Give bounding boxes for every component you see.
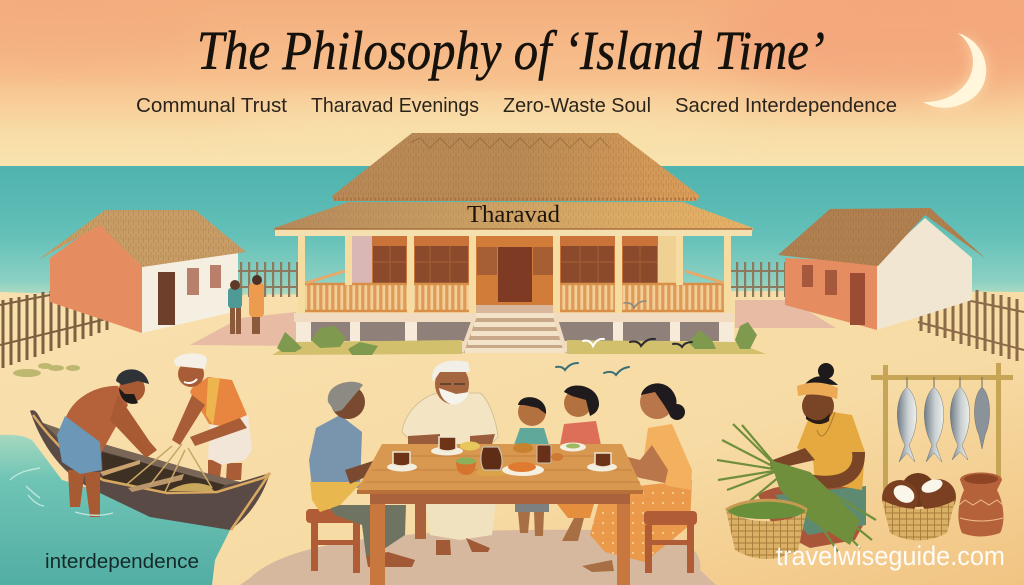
subheadings: Communal Trust bbox=[136, 95, 287, 117]
hair bun bbox=[818, 363, 834, 379]
Tharavad house bbox=[272, 133, 766, 355]
watermark: travelwiseguide.com bbox=[776, 541, 1005, 571]
right stool bbox=[644, 511, 697, 573]
boat hull bbox=[30, 410, 270, 530]
net lines bbox=[126, 444, 212, 492]
thatched roof bbox=[778, 208, 985, 266]
white wall bbox=[140, 250, 238, 333]
upper roof bbox=[332, 133, 700, 201]
sky background bbox=[0, 0, 1024, 167]
man two turban bbox=[174, 353, 207, 369]
sea bbox=[0, 166, 1024, 301]
man two dhoti bbox=[208, 414, 252, 465]
coconut basket bbox=[882, 473, 956, 540]
boat interior bbox=[102, 452, 225, 493]
man two head bbox=[178, 361, 204, 387]
left hut bbox=[38, 210, 246, 333]
grey-haired man bbox=[309, 382, 415, 567]
table bbox=[357, 444, 643, 585]
windows bbox=[802, 265, 837, 295]
orange wall bbox=[785, 258, 877, 330]
beach sand bbox=[0, 291, 1024, 585]
weaver bbox=[758, 363, 866, 548]
under floor bbox=[298, 322, 728, 341]
subheadings bbox=[136, 95, 897, 117]
hanging fish bbox=[897, 387, 990, 462]
door bbox=[498, 247, 532, 302]
clay pot bbox=[958, 472, 1003, 536]
label: Tharavad: Tharavad bbox=[467, 201, 560, 228]
back fences bbox=[238, 262, 790, 297]
steps bbox=[462, 313, 567, 353]
right hut bbox=[778, 208, 985, 330]
lily patches bbox=[13, 363, 80, 377]
family on the path bbox=[228, 275, 264, 334]
shadow under table bbox=[240, 530, 716, 585]
orange gable wall bbox=[50, 222, 142, 333]
subheadings: Tharavad Evenings bbox=[311, 95, 479, 117]
back wall bbox=[352, 236, 678, 312]
left stool bbox=[306, 509, 364, 573]
man one arm bbox=[110, 395, 157, 458]
elder bbox=[402, 361, 498, 555]
birds bbox=[556, 301, 692, 375]
head bbox=[802, 390, 834, 422]
turban bbox=[797, 382, 838, 399]
door bbox=[158, 272, 175, 325]
door bbox=[850, 273, 865, 325]
door bay bbox=[476, 236, 553, 305]
tea items bbox=[387, 437, 617, 476]
label: interdependence: interdependence bbox=[45, 550, 199, 573]
man one lungi bbox=[57, 416, 102, 474]
bamboo frame bbox=[871, 363, 1013, 493]
left fence bbox=[0, 281, 110, 368]
posts bbox=[298, 235, 731, 313]
man two sash bbox=[206, 378, 220, 425]
beard bbox=[806, 413, 830, 424]
thatched roof bbox=[38, 210, 246, 267]
child one bbox=[514, 397, 549, 536]
palm frond bbox=[717, 424, 876, 552]
back table leg bbox=[415, 504, 426, 539]
railings bbox=[305, 271, 724, 312]
veranda floor bbox=[476, 305, 553, 313]
family at the table bbox=[306, 361, 697, 585]
man two shirt bbox=[190, 377, 247, 426]
subheadings: Zero-Waste Soul bbox=[503, 95, 651, 117]
fish drying rack bbox=[871, 363, 1013, 493]
woven basket bbox=[726, 500, 807, 559]
shallow water bbox=[0, 435, 230, 585]
catch bbox=[168, 483, 214, 491]
subheadings: Sacred Interdependence bbox=[675, 95, 897, 117]
water ripples bbox=[10, 468, 113, 515]
sand patches bbox=[190, 300, 836, 346]
gardens bbox=[272, 340, 462, 355]
lower roof bbox=[274, 202, 753, 233]
window panes bbox=[373, 246, 657, 285]
piers bbox=[296, 322, 734, 345]
moon bbox=[923, 33, 986, 108]
woman bbox=[582, 383, 692, 572]
man one beard bbox=[119, 388, 138, 404]
child two bbox=[557, 386, 601, 541]
far side bbox=[43, 423, 240, 485]
windows bbox=[187, 265, 221, 295]
lap bbox=[758, 484, 866, 548]
man one cap bbox=[116, 369, 149, 385]
white wall bbox=[877, 218, 972, 330]
man one torso bbox=[66, 386, 128, 455]
man two arms bbox=[172, 395, 247, 446]
man two legs bbox=[208, 460, 242, 480]
title: The Philosophy of ‘Island Time’ bbox=[197, 20, 825, 81]
fishermen scene bbox=[30, 353, 270, 530]
window wall bbox=[372, 236, 658, 286]
plinth bbox=[294, 313, 734, 322]
man one head bbox=[119, 376, 145, 402]
right fence bbox=[918, 279, 1024, 361]
shirt bbox=[797, 411, 865, 490]
necklace bbox=[817, 412, 835, 436]
man one legs bbox=[68, 470, 100, 517]
arms bbox=[770, 448, 865, 488]
gunwale bbox=[33, 415, 270, 530]
